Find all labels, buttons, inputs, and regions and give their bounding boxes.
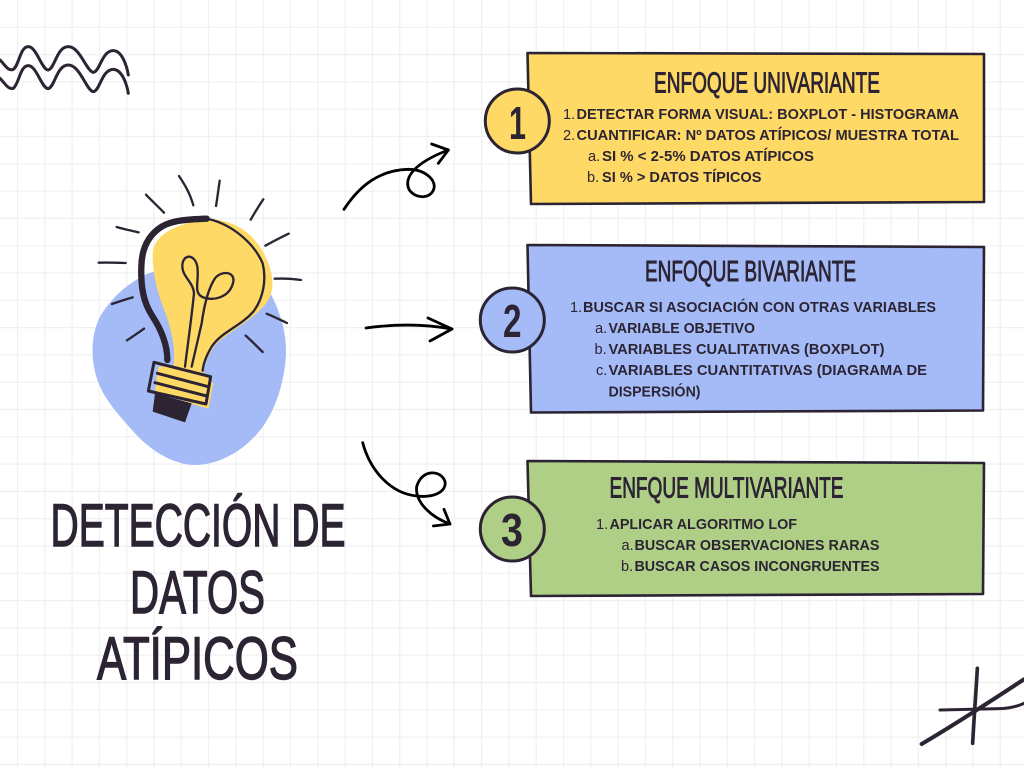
card background 2 xyxy=(528,245,984,412)
lamp base bottom xyxy=(153,393,192,422)
lamp base xyxy=(148,362,211,404)
number badge 3: 3 xyxy=(501,504,523,556)
arrow to card 1 xyxy=(344,144,448,209)
blue blob xyxy=(92,269,286,465)
list 2: VARIABLES CUANTITATIVAS (DIAGRAMA DE xyxy=(608,363,927,379)
list 3: BUSCAR OBSERVACIONES RARAS xyxy=(634,538,880,554)
number badge 1 xyxy=(485,89,549,153)
number badge 2 xyxy=(480,288,544,352)
number badge 1: 1 xyxy=(509,97,526,149)
decorative cross mark bottom right xyxy=(922,668,1024,744)
list 2: c. xyxy=(596,363,607,379)
list 1: CUANTIFICAR: Nº DATOS ATÍPICOS/ MUESTRA TOTAL xyxy=(576,127,959,144)
list 3: BUSCAR CASOS INCONGRUENTES xyxy=(634,559,880,575)
title: DETECCIÓN DE xyxy=(50,492,346,559)
list 1 xyxy=(563,107,959,186)
panel: enfoque univariante xyxy=(485,53,984,204)
title: DATOS xyxy=(130,559,265,626)
card background 3 xyxy=(528,461,984,596)
list 1: 1. xyxy=(563,107,575,123)
bulb outline thick side xyxy=(141,219,207,360)
title xyxy=(50,492,346,692)
arrow to card 3 xyxy=(363,443,450,526)
title: ATÍPICOS xyxy=(97,625,298,692)
list 3 xyxy=(596,517,880,575)
list 3: a. xyxy=(622,538,634,554)
number badge 2: 2 xyxy=(503,295,522,347)
list 1: b. xyxy=(587,170,599,186)
bulb outline thin side xyxy=(203,219,264,371)
list 3: 1. xyxy=(596,517,608,533)
bulb glass xyxy=(153,219,272,408)
heading 3: ENFQUE MULTIVARIANTE xyxy=(610,472,844,504)
list 1: SI % > DATOS TÍPICOS xyxy=(602,169,762,186)
panel: enfoque multivariante xyxy=(480,461,984,596)
heading 2: ENFOQUE BIVARIANTE xyxy=(645,256,856,288)
list 2: VARIABLE OBJETIVO xyxy=(608,321,755,337)
list 3: APLICAR ALGORITMO LOF xyxy=(610,517,797,533)
rays xyxy=(99,176,301,352)
list 2: VARIABLES CUALITATIVAS (BOXPLOT) xyxy=(608,342,885,358)
list 2 xyxy=(570,298,936,400)
number badge 3 xyxy=(480,497,544,561)
list 1: DETECTAR FORMA VISUAL: BOXPLOT - HISTOGRAMA xyxy=(576,107,959,123)
list 1: a. xyxy=(588,149,600,165)
list 1: 2. xyxy=(563,128,575,144)
filament xyxy=(182,257,233,367)
list 2: DISPERSIÓN) xyxy=(608,382,701,400)
panel: enfoque bivariante xyxy=(480,245,984,412)
card background 1 xyxy=(528,53,984,204)
arrow to card 2 xyxy=(366,318,452,341)
list 2: 1. xyxy=(570,300,582,316)
list 2: BUSCAR SI ASOCIACIÓN CON OTRAS VARIABLES xyxy=(583,298,936,316)
icon: light bulb on blue blob xyxy=(92,176,301,465)
heading 1: ENFOQUE UNIVARIANTE xyxy=(654,68,880,100)
decorative squiggle top left xyxy=(0,47,128,93)
list 3: b. xyxy=(621,559,633,575)
list 2: a. xyxy=(595,321,607,337)
list 1: SI % < 2-5% DATOS ATÍPICOS xyxy=(602,148,814,165)
list 2: b. xyxy=(594,342,607,358)
